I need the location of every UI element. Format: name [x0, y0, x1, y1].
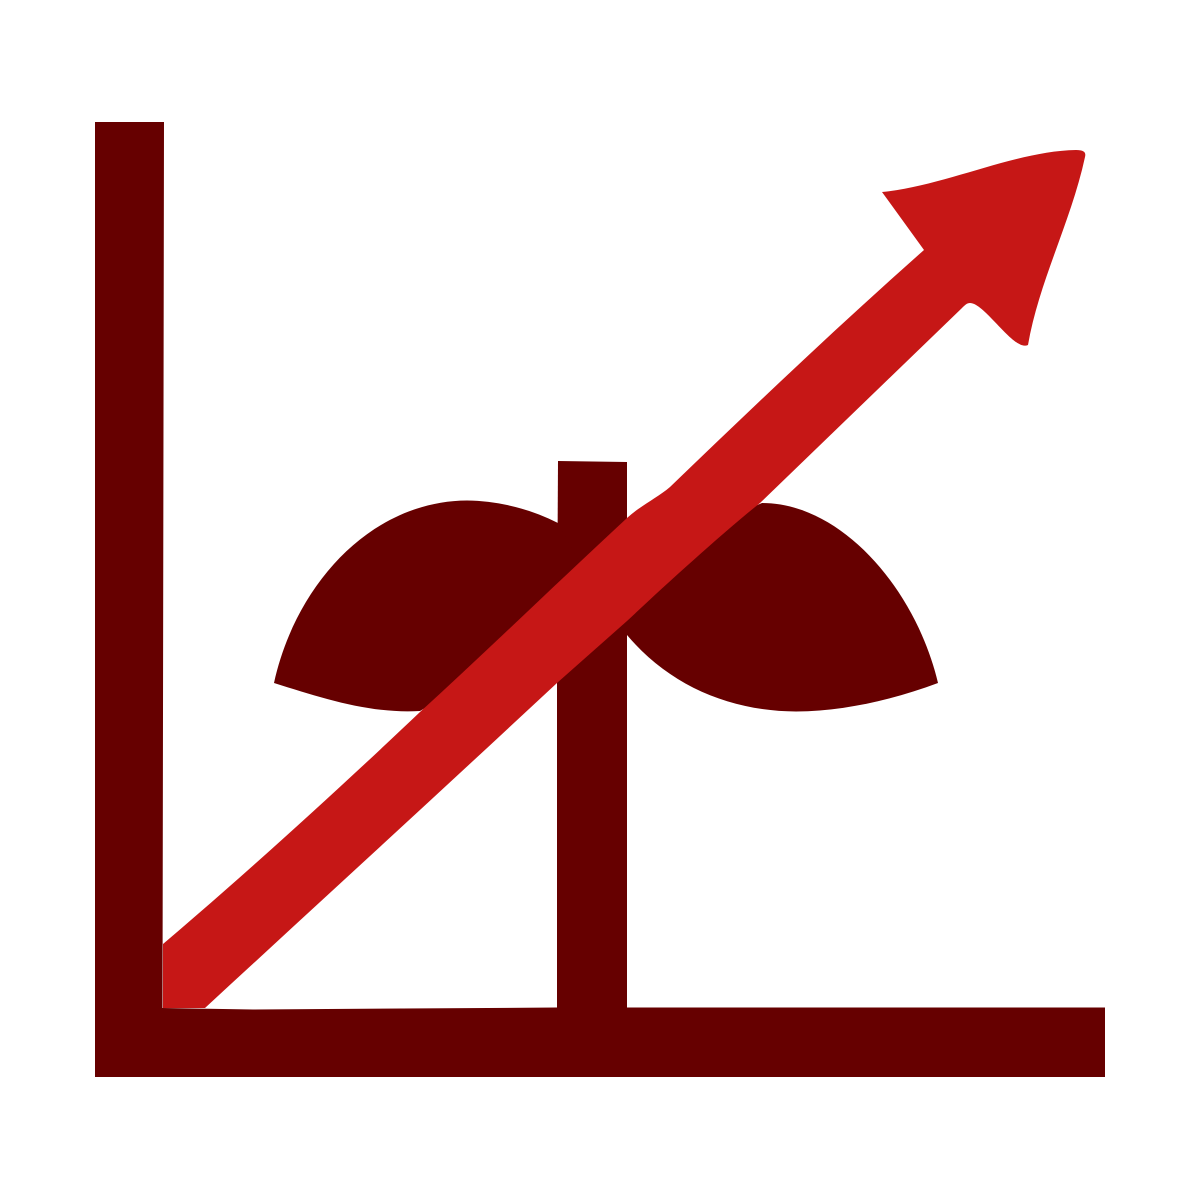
- rising arrow: [163, 150, 1085, 1008]
- right leaf: [610, 503, 938, 712]
- chart axes: [95, 122, 1105, 1077]
- plant stem: [557, 461, 627, 1008]
- left leaf: [274, 500, 600, 711]
